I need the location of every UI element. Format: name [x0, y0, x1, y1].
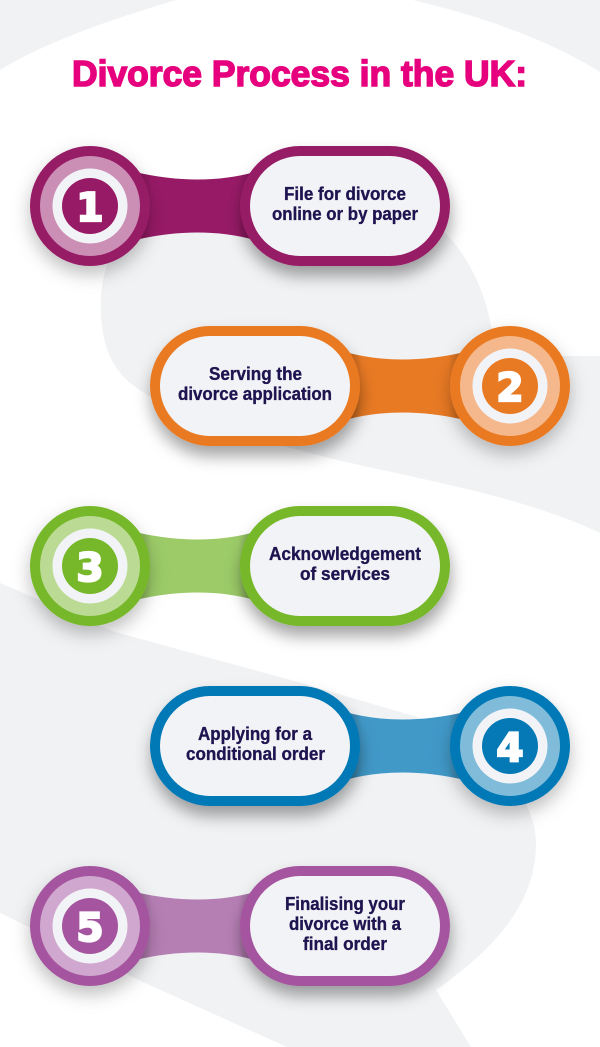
- number badge 5: 5: [76, 906, 104, 951]
- pill 4: [150, 686, 360, 806]
- number badge 3: [30, 506, 150, 626]
- number badge 5: [30, 866, 150, 986]
- pill 5: divorce with a: [289, 914, 402, 934]
- connector 5: [135, 892, 255, 960]
- pill 5: Finalising your: [285, 894, 405, 914]
- connector 1: [135, 172, 255, 240]
- step 5: [30, 866, 450, 986]
- pill 5: [240, 866, 450, 986]
- background: lower S curve shape: [0, 583, 536, 1047]
- step 3: [30, 506, 450, 626]
- pill 2: Serving the: [209, 364, 302, 384]
- pill 4: Applying for a: [198, 724, 313, 744]
- pill 2: divorce application: [178, 384, 332, 404]
- pill 1: [240, 146, 450, 266]
- pill 1: online or by paper: [272, 204, 418, 224]
- pill 3: [240, 506, 450, 626]
- pill 2: [150, 326, 360, 446]
- connector 2: [345, 352, 465, 420]
- step 2: [150, 326, 570, 446]
- connector 3: [135, 532, 255, 600]
- pill 3: Acknowledgement: [269, 544, 421, 564]
- step 4: [150, 686, 570, 806]
- pill 1: File for divorce: [284, 184, 406, 204]
- number badge 2: 2: [496, 366, 524, 411]
- connector 4: [345, 712, 465, 780]
- number badge 4: [450, 686, 570, 806]
- number badge 3: 3: [76, 546, 104, 591]
- background: upper S curve shape: [101, 190, 600, 533]
- number badge 1: 1: [76, 186, 104, 231]
- background: top corner shapes: [0, 0, 600, 72]
- pill 5: final order: [303, 934, 387, 954]
- pill 4: conditional order: [186, 744, 325, 764]
- step 1: [30, 146, 450, 266]
- pill 3: of services: [300, 564, 390, 584]
- number badge 4: 4: [496, 726, 524, 771]
- number badge 2: [450, 326, 570, 446]
- number badge 1: [30, 146, 150, 266]
- title: Divorce Process in the UK:: [72, 53, 527, 94]
